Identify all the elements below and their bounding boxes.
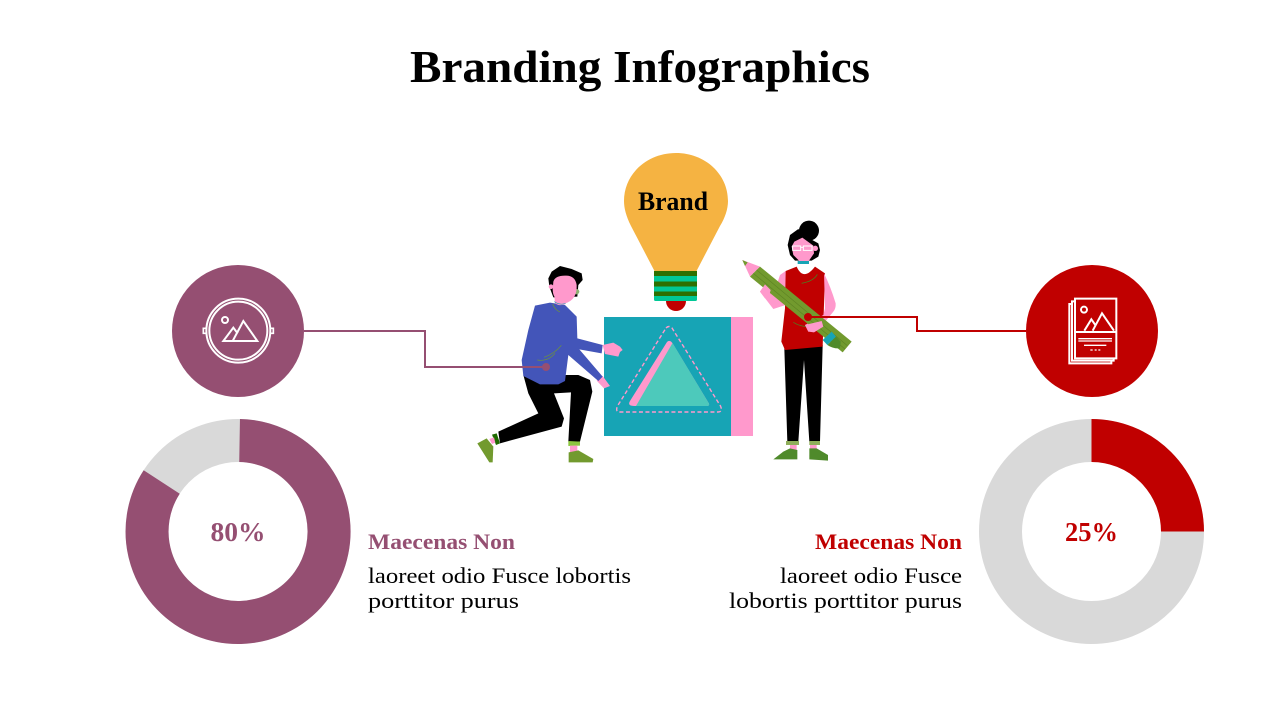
bulb label: Brand — [638, 187, 709, 216]
right body: laoreet odio Fusce — [780, 563, 962, 588]
connector: right circle to woman — [804, 313, 1026, 331]
illustration: light bulb — [624, 153, 728, 311]
left heading: Maecenas Non — [368, 529, 515, 554]
illustration: kneeling man — [477, 266, 623, 462]
connector: left circle to man — [304, 331, 550, 371]
text block: right — [729, 529, 962, 613]
left body: laoreet odio Fusce lobortis — [368, 563, 631, 588]
illustration: woman with pencil — [742, 221, 852, 461]
panel: left badge — [172, 265, 304, 397]
value: 80%: 80% — [210, 517, 266, 547]
title: Branding Infographics — [410, 41, 870, 92]
donut chart: 80% — [147, 440, 329, 622]
text block: left — [368, 529, 631, 613]
illustration: box with triangle — [604, 317, 753, 436]
icon: framed mountain — [203, 299, 273, 363]
donut chart: 25% — [1000, 440, 1182, 622]
icon: stacked documents — [1069, 299, 1116, 363]
right body: lobortis porttitor purus — [729, 588, 962, 613]
value: 25%: 25% — [1065, 517, 1118, 547]
panel: right badge — [1026, 265, 1158, 397]
right body — [729, 563, 962, 613]
right heading: Maecenas Non — [815, 529, 962, 554]
left body: porttitor purus — [368, 588, 519, 613]
left body — [368, 563, 631, 613]
